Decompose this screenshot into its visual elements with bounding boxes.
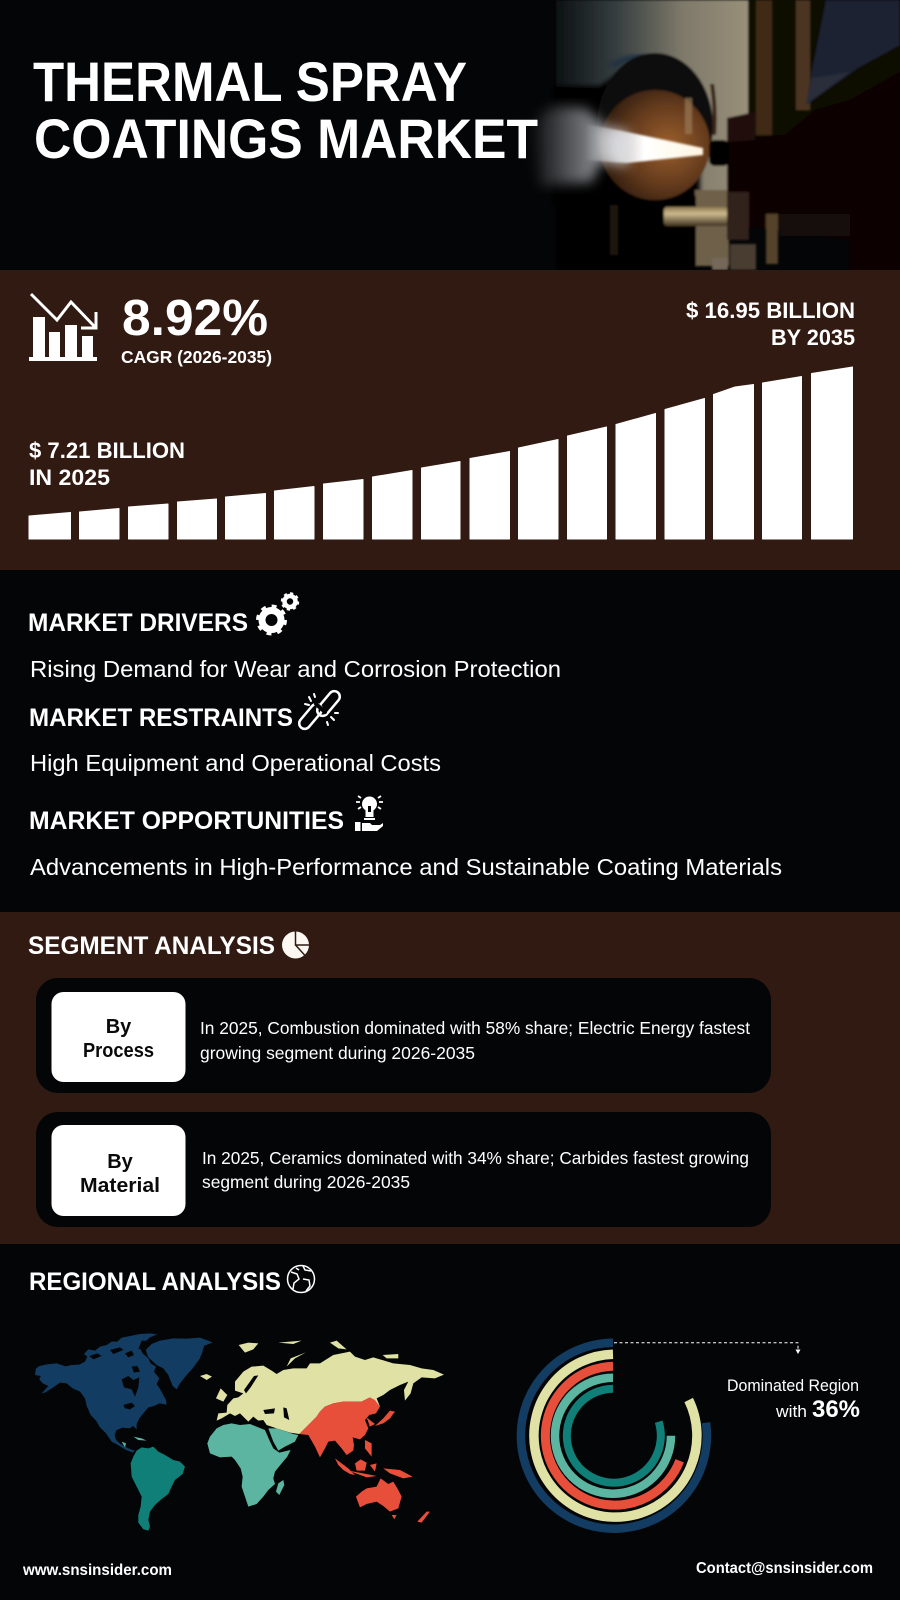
map: Europe water details bbox=[244, 1375, 289, 1420]
CAGR value: 8.92% bbox=[122, 289, 268, 346]
footer: website: www.snsinsider.com bbox=[22, 1562, 172, 1579]
card: by material: By bbox=[107, 1151, 134, 1173]
callout: dominated region: with bbox=[775, 1403, 807, 1421]
heading: regional analysis: REGIONAL ANALYSIS bbox=[29, 1268, 281, 1296]
icon: hand with light bulb bbox=[355, 796, 383, 831]
heading: segment analysis: SEGMENT ANALYSIS bbox=[28, 932, 275, 960]
callout: dominated region: 36% bbox=[812, 1396, 860, 1423]
heading: market restraints: MARKET RESTRAINTS bbox=[29, 704, 293, 732]
panel: regional analysis bbox=[0, 1244, 900, 1600]
map: South America bbox=[131, 1447, 185, 1531]
heading: market drivers: MARKET DRIVERS bbox=[28, 609, 248, 637]
map: North America water details bbox=[89, 1341, 146, 1409]
card: by material: segment during 2026-2035 bbox=[202, 1172, 410, 1192]
card: by process: Process bbox=[83, 1040, 154, 1062]
panel: market size bbox=[0, 270, 900, 570]
title: THERMAL SPRAY bbox=[33, 50, 467, 113]
text: restraint: High Equipment and Operational Costs bbox=[30, 750, 441, 776]
card: by process bbox=[36, 978, 771, 1093]
map: Caribbean islands bbox=[122, 1437, 147, 1447]
icon: chart with trend arrow bbox=[29, 294, 97, 361]
CAGR label: CAGR (2026-2035) bbox=[121, 347, 272, 367]
2035 value label: $ 16.95 BILLION bbox=[686, 298, 855, 323]
text: driver: Rising Demand for Wear and Corrosion Protection bbox=[30, 656, 561, 682]
heading: market opportunities: MARKET OPPORTUNITIES bbox=[29, 807, 344, 835]
2035 value label bbox=[686, 298, 855, 350]
map: Asia Pacific bbox=[299, 1397, 430, 1523]
ring: South America bbox=[567, 1389, 661, 1483]
card: by process: By bbox=[106, 1016, 132, 1038]
icon: gears bbox=[258, 593, 298, 634]
ring: Europe bbox=[534, 1354, 697, 1517]
card: by material: In 2025, Ceramics dominated with 34% share; Carbides fastest growing bbox=[202, 1148, 749, 1168]
card: by process: In 2025, Combustion dominated with 58% share; Electric Energy fastest bbox=[200, 1018, 750, 1038]
2025 value label: IN 2025 bbox=[29, 465, 110, 490]
panel: drivers, restraints, opportunities bbox=[0, 570, 900, 912]
card: by material bbox=[36, 1112, 771, 1227]
card: by process: growing segment during 2026-2035 bbox=[200, 1043, 475, 1063]
2025 value label bbox=[29, 438, 185, 490]
callout: dominated region: Dominated Region bbox=[727, 1377, 859, 1395]
2025 value label: $ 7.21 BILLION bbox=[29, 438, 185, 463]
radial bar chart bbox=[521, 1343, 707, 1529]
footer: contact: Contact@snsinsider.com bbox=[696, 1560, 873, 1577]
icon: globe bbox=[288, 1266, 314, 1292]
ring: North America bbox=[521, 1343, 707, 1529]
title: COATINGS MARKET bbox=[34, 107, 538, 170]
photo: thermal spray gun with flame bbox=[530, 0, 900, 270]
card: by material: Material bbox=[80, 1175, 160, 1197]
map: North America bbox=[35, 1333, 213, 1453]
title bbox=[33, 50, 538, 170]
ring: Africa bbox=[555, 1378, 671, 1494]
2035 value label: BY 2035 bbox=[771, 325, 855, 350]
bar chart: market growth bbox=[29, 367, 852, 539]
map: Europe and North Asia bbox=[200, 1341, 444, 1434]
map: Africa and Middle East bbox=[207, 1423, 298, 1507]
callout arrow: dashed leader bbox=[614, 1343, 800, 1354]
callout: dominated region bbox=[727, 1377, 860, 1423]
icon: broken chain bbox=[297, 689, 342, 731]
panel: header bbox=[0, 0, 900, 270]
world map bbox=[35, 1333, 444, 1531]
ring: Asia Pacific bbox=[545, 1366, 680, 1505]
icon: pie chart bbox=[282, 930, 310, 958]
panel: segment analysis bbox=[0, 912, 900, 1244]
text: opportunity: Advancements in High-Performance and Sustainable Coating Materials bbox=[30, 854, 782, 880]
